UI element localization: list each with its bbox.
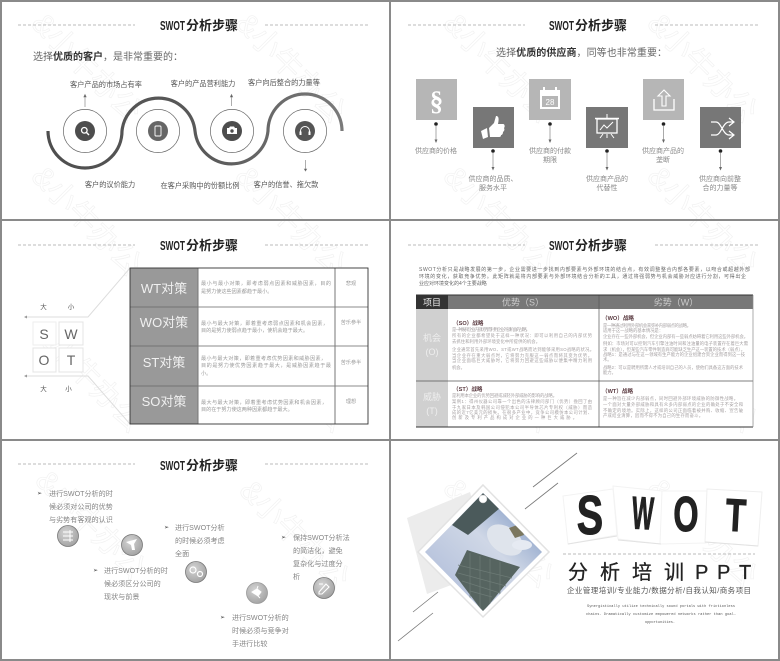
table: strategy matrix: 术。 (603, 356, 612, 363)
table: strategy matrix: 是一种旨在减少内部弱点，同时回避外部环境威胁的防御性战略。 (603, 395, 738, 402)
table: strategy matrix: 能力。 (603, 369, 616, 376)
table: strategy matrix: (T) (426, 406, 438, 416)
item: price: § (430, 86, 443, 116)
text block: point 2: 候必须区分公司的 (104, 579, 161, 588)
diagram: SWOT matrix: 大 (40, 384, 47, 393)
table: countermeasures: 最小与最大对策，即着重考虑弱点因素和机会因素， (201, 320, 328, 327)
text: &小牛办公 (233, 474, 355, 596)
table: countermeasures: SO对策 (142, 394, 186, 409)
text: &小牛办公 (27, 317, 149, 439)
text block: point 3: 的时候必须考虑 (175, 536, 225, 545)
heading: slide 3 title: 分析步骤 (186, 238, 238, 253)
table: strategy matrix: 所有的企业都希望处于这样一种状况：即可以利用自己的内部优势 (452, 332, 593, 339)
labels: customer factors: 客户的信誉、拖欠款 (254, 180, 318, 189)
text block: point 4: 手进行比较 (232, 639, 267, 648)
table: strategy matrix: （WO）战略 (602, 314, 634, 322)
table: countermeasures: 最小与最小对策，即考虑弱点因素和威胁因素，目的 (201, 280, 331, 287)
labels: customer factors: 客户的议价能力 (85, 180, 135, 189)
chart: wave line (48, 94, 342, 168)
text block: point 4: 时候必须与竞争对 (232, 626, 289, 635)
arrows: label pointers (84, 94, 307, 190)
item: monopoly (642, 79, 684, 164)
table: countermeasures: 最大与最大对策，即着重考虑优势因素和机会因素， (201, 399, 327, 406)
text block: SWOT intro (419, 266, 750, 287)
text block: point 5: 复杂化与过度分 (293, 559, 343, 568)
table: strategy matrix: 项目 (423, 298, 441, 308)
diagram: SWOT matrix: 大 (40, 302, 47, 311)
labels: customer factors: 在客户采购中的份额比例 (160, 181, 240, 190)
heading: slide 1 title: SWOT (160, 18, 185, 33)
heading: slide 1 title (18, 18, 370, 33)
item: substitutes: 供应商产品的 (586, 174, 628, 183)
item: substitutes: 代替性 (596, 183, 618, 192)
text: &小牛办公 (437, 472, 559, 594)
table: strategy matrix: 一个面对大量外部威胁和具有众多内部弱点的企业的确处于不安全和 (603, 401, 743, 408)
text block: point 2: ➢ (93, 568, 98, 574)
title: SWOT letter cards: W (631, 487, 655, 540)
text block: English description (586, 604, 736, 625)
text block: point 1: 进行SWOT分析的时 (49, 489, 113, 498)
item: quality (468, 107, 518, 192)
text: &小牛办公 (437, 317, 559, 439)
text: &小牛办公 (641, 7, 763, 129)
table: strategy matrix: 是利用本企业的优势回避或减轻外部威胁的影响的战略。 (452, 392, 557, 399)
text: &小牛办公 (229, 160, 351, 282)
icon: list badge (58, 526, 78, 546)
item: quality: 供应商的品质、 (468, 174, 518, 183)
labels: customer factors (70, 78, 320, 190)
table: strategy matrix: 劣势（W） (654, 296, 698, 308)
icon: phone (136, 109, 180, 153)
decorative diagonal lines (398, 453, 577, 641)
text: &小牛办公 (437, 160, 559, 282)
text block: point 5 (281, 533, 350, 581)
table: strategy matrix: 企业通常首先采用WO、ST或WT战略而达到能够采用SO战略的状况。 (452, 346, 594, 353)
table: strategy matrix: 产或结业清算，因而不得不为自己的生存而奋斗。 (603, 412, 703, 419)
text block: point 4 (220, 613, 289, 648)
item: payment terms: 期限 (543, 155, 557, 164)
heading: slide 2 title: SWOT (549, 18, 574, 33)
text block: point 1: ➢ (37, 491, 42, 497)
text block: point 5: 析 (293, 572, 300, 581)
icon: gears badge (186, 562, 206, 582)
text block: point 3: 进行SWOT分析 (175, 523, 225, 532)
text block: SWOT intro: SWOT分析只是战略发展的第一步，企业需要进一步找到内部要素与外部环境的结合点，有效调整整合内部各要素，以吻合或超越外部 (419, 266, 750, 273)
table: strategy matrix (416, 295, 753, 427)
icon: network badge (246, 582, 268, 604)
text block: point 1: 候必须对公司的优势 (49, 502, 113, 511)
heading: slide 2 title (408, 18, 758, 33)
icon: headphones (283, 109, 327, 153)
item: monopoly: 供应商产品的 (642, 146, 684, 155)
diagram: SWOT matrix: S (39, 326, 49, 342)
text: &小牛办公 (229, 7, 351, 129)
text: &小牛办公 (25, 7, 147, 129)
table: strategy matrix: 机会 (423, 332, 441, 343)
table: strategy matrix: 当企业存在重大弱点时，它将努力克服这一弱点而将其变为优势。 (452, 352, 592, 359)
diagram: SWOT matrix: T (67, 352, 76, 368)
table: strategy matrix: （ST）战略 (453, 385, 483, 393)
heading: slide 4 title (408, 238, 758, 253)
table: countermeasures: ST对策 (143, 355, 185, 370)
table: strategy matrix: 成的近7亿美元的损失。在很多产业中，竞争公司模仿本公司计划、 (452, 409, 592, 416)
text block: SWOT intro: 环境的变化，获取竞争优势。此矩阵就是将内部要素与外部环境结合分析的工具，通过将强弱势与机会威胁对应进行分割，可得出企 (419, 273, 746, 280)
text block: point 2 (93, 566, 168, 601)
heading: slide 5 title (18, 458, 370, 473)
table: strategy matrix: 去抓住和利用外部环境变化中所提供的机会。 (452, 338, 540, 345)
table: strategy matrix: 是一种发挥企业内部优势而利用企业外部机会的战略。 (452, 326, 530, 333)
table: countermeasures: WO对策 (140, 315, 188, 330)
table: countermeasures: 苦乐参半 (341, 319, 361, 326)
text: &小牛办公 (437, 7, 559, 129)
table: strategy matrix: （SO）战略 (453, 319, 484, 327)
item: forward integration: 供应商向前整 (699, 174, 741, 183)
table: countermeasures: 目的是努力使优势因素趋于最大，是威胁因素趋于最 (201, 362, 331, 369)
table: strategy matrix: 是一种通过利用外部机会来弥补内部弱点的战略。 (603, 322, 691, 329)
icon: search (63, 109, 107, 153)
text block: point 3: ➢ (164, 525, 169, 531)
item: forward integration (699, 107, 741, 192)
table: strategy matrix: (O) (426, 347, 438, 357)
table: strategy matrix: 战略1：是通过与在这一领域有生产能力的企业组建合资企业而得到这一技 (603, 351, 746, 358)
diagram: SWOT matrix: 小 (65, 384, 72, 393)
item: monopoly: 垄断 (656, 155, 670, 164)
item: payment terms (529, 79, 571, 164)
title: SWOT letter cards: O (673, 486, 699, 542)
text: &小牛办公 (641, 160, 763, 282)
text block: point 3: 全面 (175, 549, 189, 558)
text block: point 1: 与劣势有客观的认识 (49, 515, 113, 524)
table: countermeasures: WT对策 (141, 281, 187, 296)
item: price (415, 79, 457, 155)
table: countermeasures: 目的是努力使弱点趋于最小，使机会趋于最大。 (201, 327, 308, 334)
icon: camera (210, 109, 254, 153)
text: &小牛办公 (25, 160, 147, 282)
title: SWOT letter cards: S (577, 486, 603, 547)
title: SWOT letter cards: T (724, 490, 748, 542)
text: &小牛办公 (231, 317, 353, 439)
table: strategy matrix: 优势（S） (502, 296, 544, 308)
table: countermeasures: 是努力使这些因素都趋于最小。 (201, 288, 272, 295)
icon: signpost badge (122, 534, 142, 556)
subtitle: 企业管理培训/专业能力/数据分析/自我认知/商务项目 (567, 585, 751, 595)
table: strategy matrix: 例如：市场对可以控制汽车引擎注油时间和注油量的电子装置存在着巨大需 (603, 340, 749, 347)
heading: slide 1 title: 分析步骤 (186, 18, 238, 33)
diagram: SWOT matrix: O (39, 352, 50, 368)
table: strategy matrix: 不确定的境地。实际上，这样的公司正面临着被并购、收缩、宣告破 (603, 407, 744, 414)
table: countermeasures (130, 268, 368, 424)
table: countermeasures: 目的在于努力使这两种因素都趋于最大。 (201, 406, 293, 413)
table: strategy matrix: 于九家日本及韩国公司侵犯本公司半导体芯片专利权（威胁）而造 (452, 404, 593, 411)
icon: pen badge (314, 578, 334, 598)
item: price: 供应商的价格 (415, 146, 457, 155)
text block: point 2: 现状与前景 (104, 592, 139, 601)
table: strategy matrix: 适用于这一战略的基本情况是： (603, 327, 663, 334)
panel: supplier selection (408, 18, 758, 192)
panel: SWOT strategy matrix (408, 238, 758, 427)
table: countermeasures: 苦乐参半 (341, 359, 361, 366)
table: strategy matrix: （WT）战略 (602, 387, 633, 395)
heading: slide 5 title: 分析步骤 (186, 458, 238, 473)
table: strategy matrix: 案例1：得州仪器公司靠一个出色的法律顾问部门（优势）挽回了由 (452, 398, 592, 405)
text block: SWOT intro: 业应对环境变化的4个主要战略 (419, 280, 487, 287)
table: strategy matrix: 战略2：可以是聘用所需人才或培训自己的人员，使他们具备这方面的技术 (603, 364, 744, 371)
item: payment terms: 28 (546, 98, 555, 107)
table: strategy matrix: 机会。 (452, 364, 465, 371)
text block: point 3 (164, 523, 225, 558)
panel: cover slide (398, 453, 762, 641)
text block: point 4: ➢ (220, 615, 225, 621)
text block: point 1 (37, 489, 113, 524)
heading: slide 5 title: SWOT (160, 458, 185, 473)
text block: point 5: 保持SWOT分析法 (293, 533, 350, 542)
text block: point 5: 的简洁化，避免 (293, 546, 343, 555)
table: strategy matrix: 企业存在一些外部机会，但企业内部有一些弱点妨碍着它利用这些外部机会。 (603, 333, 748, 340)
table: strategy matrix: 当企业面临巨大威胁时，它将努力回避这些威胁以便集中精力利用 (452, 357, 592, 364)
item: payment terms: 供应商的付款 (529, 146, 571, 155)
text: &小牛办公 (641, 472, 763, 594)
text block: point 4: 进行SWOT分析的 (232, 613, 289, 622)
labels: customer factors: 客户向后整合的力量等 (248, 78, 320, 87)
text: &小牛办公 (29, 464, 151, 586)
panel: SWOT countermeasures (18, 238, 370, 424)
panel: analysis principles (18, 458, 370, 648)
item: quality: 服务水平 (479, 183, 507, 192)
text block: point 5: ➢ (281, 535, 286, 541)
text block: point 2: 进行SWOT分析的时 (104, 566, 168, 575)
title: SWOT letter cards (563, 486, 762, 547)
table: countermeasures: 理想 (346, 398, 356, 405)
heading: slide 2 title: 分析步骤 (575, 18, 627, 33)
item: substitutes (586, 107, 628, 192)
text block: English description: Synergistically utilize technically sound portals with frictionless (587, 604, 735, 609)
text block: English description: chains. Dramatically customize empowered networks rather than goal- (586, 612, 736, 617)
table: strategy matrix: 威胁 (423, 391, 441, 402)
table: countermeasures: 最小与最大对策，即着重考虑优势因素和威胁因素， (201, 355, 326, 362)
diagram: SWOT matrix: W (64, 326, 78, 342)
table: countermeasures: 悲观 (346, 280, 356, 287)
text block: English description: opportunities. (645, 620, 675, 625)
table: strategy matrix: 求（机会），但某些汽车零件制造商可能缺乏生产这一装置的技术（弱点）。 (603, 346, 745, 353)
diagram: SWOT matrix (24, 268, 130, 424)
photo: skyscraper in diamond frame (407, 485, 550, 617)
table: countermeasures: 小。 (201, 370, 211, 377)
diagram: SWOT matrix: 小 (68, 302, 75, 311)
heading: slide 4 title: SWOT (549, 238, 574, 253)
heading: slide 3 title (18, 238, 370, 253)
intro text: suppliers: 选择优质的供应商，同等也非常重要： (496, 46, 667, 59)
heading: slide 3 title: SWOT (160, 238, 185, 253)
table: strategy matrix: 创新及专利产品构成对企业的一种巨大威胁。 (452, 414, 577, 421)
text: &小牛办公 (641, 317, 763, 439)
panel: customer selection wave (18, 18, 370, 190)
intro text: customers: 选择优质的客户，是非常重要的： (33, 50, 183, 63)
heading: slide 4 title: 分析步骤 (575, 238, 627, 253)
labels: customer factors: 客户产品的市场占有率 (70, 80, 142, 89)
labels: customer factors: 客户的产品营利能力 (171, 79, 235, 88)
title: training PPT: 分析培训PPT (568, 561, 751, 584)
item: forward integration: 合的力量等 (702, 183, 738, 192)
